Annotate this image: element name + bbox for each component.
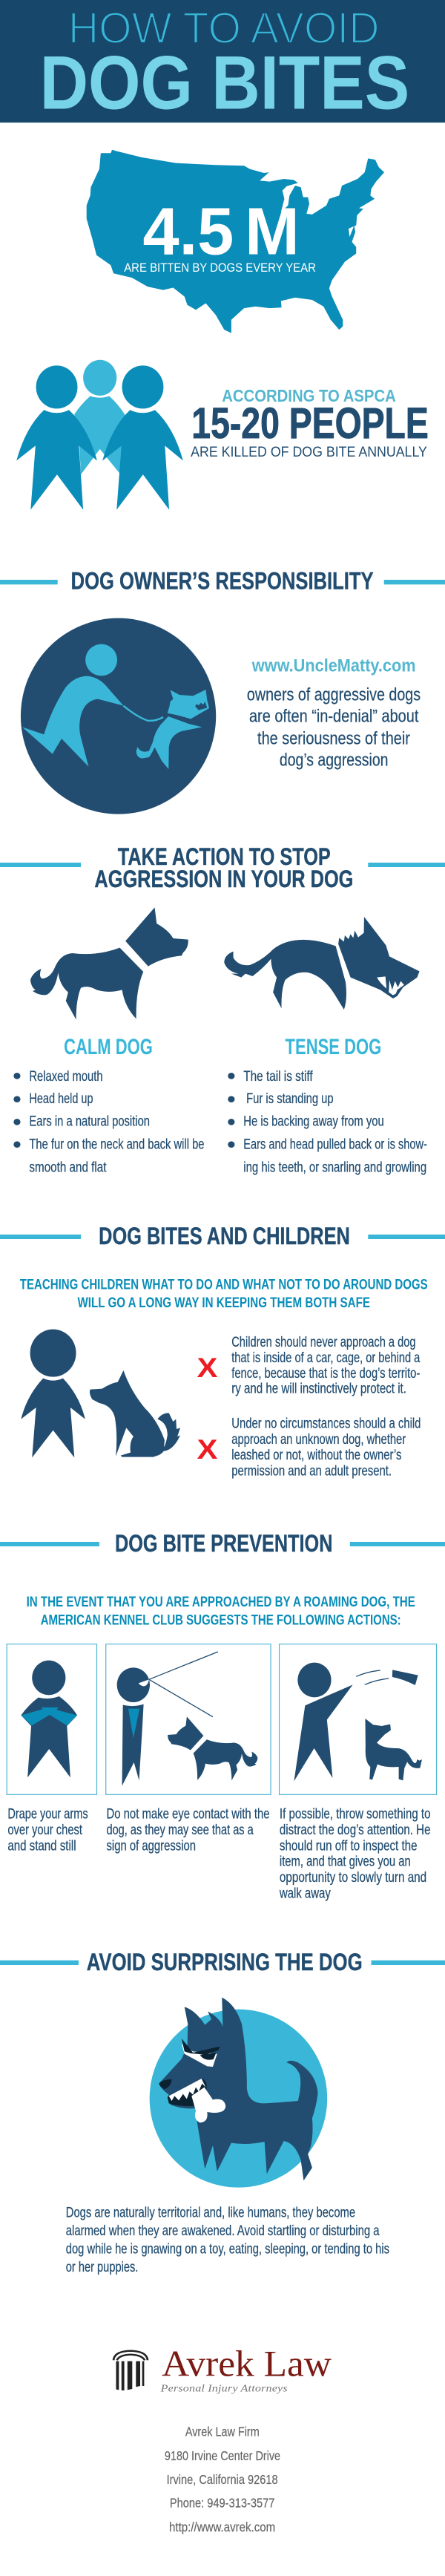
owners text block	[247, 685, 421, 770]
caption: no eye contact: dog, as they may see that as a	[106, 1822, 254, 1838]
heading rule right	[368, 1235, 445, 1239]
title: how to avoid: HOW TO AVOID	[68, 3, 380, 53]
list text: Head held up	[29, 1091, 93, 1107]
subheading	[20, 1277, 428, 1311]
heading rule left	[0, 580, 58, 584]
heading rule right	[368, 863, 445, 867]
panel: dog owner's responsibility	[0, 568, 445, 814]
contact details	[165, 2425, 280, 2535]
contact details: Phone: 949-313-3577	[170, 2496, 274, 2511]
panel: title banner and national statistics	[0, 0, 445, 510]
head	[32, 1661, 65, 1695]
heading rule right	[384, 580, 445, 584]
panel: footer	[113, 2343, 332, 2535]
back person	[74, 360, 126, 474]
front left person	[16, 365, 97, 510]
caption: throw something: walk away	[279, 1886, 331, 1901]
icon: tense dog	[224, 917, 420, 1010]
heading: DOG BITE PREVENTION	[115, 1530, 332, 1557]
icon: snarling dog with bone	[150, 1998, 327, 2188]
caption: no eye contact	[106, 1806, 270, 1854]
dog body	[136, 716, 202, 769]
caption: drape arms: Drape your arms	[7, 1806, 88, 1822]
15-20 people: 15-20 PEOPLE	[191, 399, 429, 448]
list text: The fur on the neck and back will be	[29, 1137, 205, 1152]
panel: dog bite prevention	[0, 1530, 445, 1901]
contact details: Avrek Law Firm	[185, 2425, 260, 2439]
icon: sitting dog	[90, 1370, 180, 1457]
caption: ARE KILLED OF DOG BITE ANNUALLY	[191, 444, 427, 460]
crossed arms	[21, 1707, 77, 1725]
head	[117, 1667, 150, 1702]
dog head	[168, 690, 209, 719]
frame	[7, 1644, 96, 1794]
contact details: http://www.avrek.com	[169, 2520, 275, 2535]
caption: throw something	[279, 1806, 430, 1901]
dog teeth	[195, 702, 207, 710]
caption: drape arms: and stand still	[7, 1838, 76, 1854]
owner head	[85, 644, 117, 676]
icon: column logo	[113, 2351, 148, 2390]
dog silhouette	[159, 1998, 318, 2180]
text block: never approach a dog in a car	[231, 1334, 421, 1396]
logo tagline: Personal Injury Attorneys	[160, 2384, 288, 2394]
sight lines	[149, 1652, 218, 1717]
circle background	[21, 618, 216, 814]
caption: no eye contact: sign of aggression	[106, 1838, 196, 1854]
heading rule left	[0, 1235, 81, 1239]
heading rule left	[0, 1542, 99, 1546]
dog	[365, 1719, 422, 1780]
list text: smooth and flat	[29, 1160, 107, 1175]
front right person	[102, 365, 183, 510]
contact details: 9180 Irvine Center Drive	[165, 2448, 280, 2464]
tense dog body	[224, 940, 346, 1010]
text block: territorial: or her puppies.	[66, 2259, 138, 2275]
map of the United States	[87, 150, 384, 333]
owner body	[22, 676, 123, 767]
list text	[29, 1068, 205, 1175]
logo wordmark: Avrek Law	[162, 2343, 332, 2384]
calm dog list	[13, 1068, 205, 1175]
heading: TAKE ACTION TO STOP	[118, 843, 331, 870]
heading	[94, 843, 353, 892]
body	[294, 1684, 353, 1781]
tense dog teeth	[377, 976, 404, 996]
eye white	[182, 2044, 217, 2067]
tense dog head	[338, 917, 420, 998]
heading rule left	[0, 863, 81, 867]
panel: take action, calm dog and tense dog	[0, 843, 445, 1175]
heading: calm dog: CALM DOG	[64, 1034, 153, 1059]
list text: The tail is stiff	[243, 1068, 313, 1085]
text block: territorial	[66, 2205, 389, 2275]
bone	[191, 2088, 225, 2122]
leash	[123, 706, 163, 721]
title: dog bites: DOG BITES	[40, 41, 409, 125]
body	[122, 1704, 144, 1786]
according to ASPCA: ACCORDING TO ASPCA	[222, 386, 396, 405]
teeth	[169, 2079, 205, 2101]
frame	[106, 1644, 271, 1794]
list text: Ears in a natural position	[29, 1114, 150, 1129]
heading rule right	[372, 1961, 445, 1965]
statistic: ASPCA fatalities	[191, 386, 429, 460]
thrown object	[392, 1670, 418, 1685]
list text: Relaxed mouth	[29, 1068, 103, 1085]
icon: red x: X	[197, 1353, 218, 1383]
icon: red x: X	[197, 1434, 218, 1465]
nose	[159, 2079, 172, 2089]
brow	[182, 2039, 220, 2055]
panel: no eye contact	[106, 1644, 271, 1794]
statistic: 4.5 M: 4.5 M	[142, 194, 300, 269]
icon: three people	[16, 360, 183, 510]
panel: throw something	[280, 1644, 437, 1794]
heading rule left	[0, 1961, 79, 1965]
bullets	[228, 1073, 234, 1148]
icon: owner walking aggressive dog	[21, 618, 216, 814]
circle background	[150, 2010, 327, 2188]
panel: drape arms	[7, 1644, 96, 1794]
caption: no eye contact: Do not make eye contact with the	[106, 1806, 270, 1822]
icon: calm dog	[30, 907, 188, 1019]
heading rule right	[350, 1542, 445, 1546]
body	[21, 1696, 77, 1777]
icon: child	[21, 1330, 85, 1457]
owners text block: dog’s aggression	[280, 751, 388, 770]
mouth	[168, 2079, 207, 2106]
statistic caption: ARE BITTEN BY DOGS EVERY YEAR	[124, 261, 316, 275]
pupil	[200, 2053, 217, 2060]
tense dog list	[228, 1068, 427, 1175]
panel: avoid surprising the dog	[0, 1949, 445, 2275]
frame	[280, 1644, 437, 1794]
subheading	[27, 1594, 415, 1628]
bullets	[13, 1073, 21, 1148]
panel: dog bites and children	[0, 1223, 445, 1479]
contact details: Irvine, California 92618	[167, 2472, 278, 2488]
dog	[168, 1716, 257, 1780]
caption: drape arms	[7, 1806, 88, 1854]
list text: Fur is standing up	[246, 1091, 334, 1107]
caption: drape arms: over your chest	[7, 1822, 82, 1838]
US map with bitten statistic	[87, 150, 384, 333]
heading: tense dog: TENSE DOG	[286, 1034, 381, 1059]
head	[297, 1663, 332, 1697]
text block: never approach an unknown dog	[231, 1416, 421, 1479]
arm	[128, 1709, 139, 1739]
title banner background	[0, 0, 445, 122]
list text	[243, 1068, 427, 1175]
eye	[139, 1679, 149, 1686]
motion lines	[356, 1670, 389, 1684]
